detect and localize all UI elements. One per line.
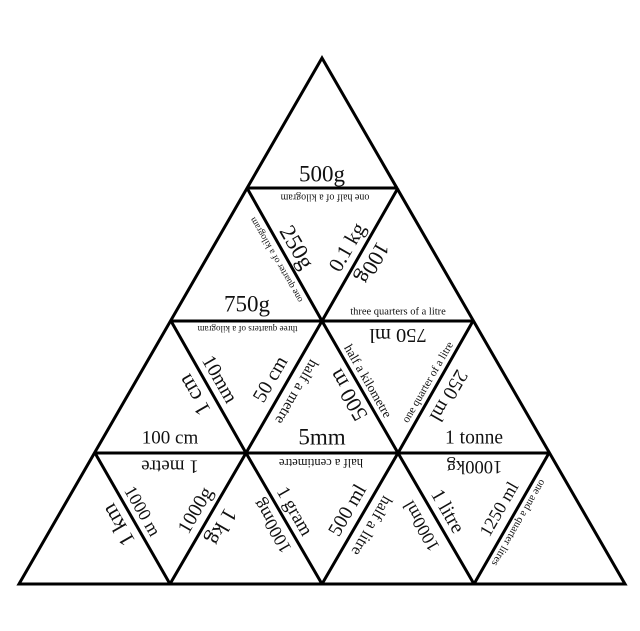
- label: three quarters of a kilogram: three quarters of a kilogram: [198, 324, 297, 334]
- label: 1000ml: 1000ml: [399, 497, 443, 555]
- label: 1250 ml: 1250 ml: [475, 478, 522, 540]
- label: 500 m: 500 m: [323, 365, 373, 425]
- label: 1 litre: 1 litre: [426, 485, 469, 537]
- label: one quarter of a litre: one quarter of a litre: [400, 340, 456, 425]
- label: 100 cm: 100 cm: [142, 427, 198, 448]
- label: 1 metre: 1 metre: [141, 456, 199, 477]
- label: 500 ml: 500 ml: [324, 480, 371, 540]
- label: 1 km: 1 km: [96, 500, 140, 551]
- label: one and a quarter litres: one and a quarter litres: [489, 477, 548, 568]
- label: half a metre: half a metre: [271, 357, 321, 427]
- label: 50 cm: 50 cm: [249, 352, 293, 406]
- label: 1000g: 1000g: [173, 483, 218, 537]
- label: 1 cm: 1 cm: [172, 370, 215, 420]
- label: one quarter of a kilogram: one quarter of a kilogram: [247, 215, 305, 304]
- label: 10mm: 10mm: [197, 352, 242, 407]
- label: half a litre: half a litre: [348, 493, 395, 558]
- label: one half of a kilogram: one half of a kilogram: [280, 192, 369, 203]
- label: 500g: 500g: [299, 162, 346, 187]
- label: 1000 m: 1000 m: [120, 482, 165, 540]
- label: 750g: 750g: [224, 292, 270, 317]
- label: 250 ml: 250 ml: [425, 366, 472, 426]
- label: 5mm: 5mm: [298, 425, 346, 450]
- label: 1000kg: 1000kg: [447, 456, 502, 476]
- label: half a kilometre: half a kilometre: [341, 342, 395, 420]
- label: 1000mg: 1000mg: [249, 495, 295, 557]
- label: 0.1 kg: 0.1 kg: [323, 218, 371, 276]
- label: 1 gram: 1 gram: [272, 483, 317, 540]
- triangle grid lines: [19, 58, 625, 584]
- label: 750 ml: 750 ml: [369, 324, 427, 346]
- label: 100g: 100g: [351, 238, 395, 288]
- label: half a centimetre: half a centimetre: [279, 456, 363, 470]
- label: 1 tonne: 1 tonne: [445, 427, 503, 448]
- label: 1 kg: 1 kg: [202, 504, 243, 550]
- label: 250g: 250g: [275, 221, 319, 274]
- label: three quarters of a litre: three quarters of a litre: [350, 306, 446, 317]
